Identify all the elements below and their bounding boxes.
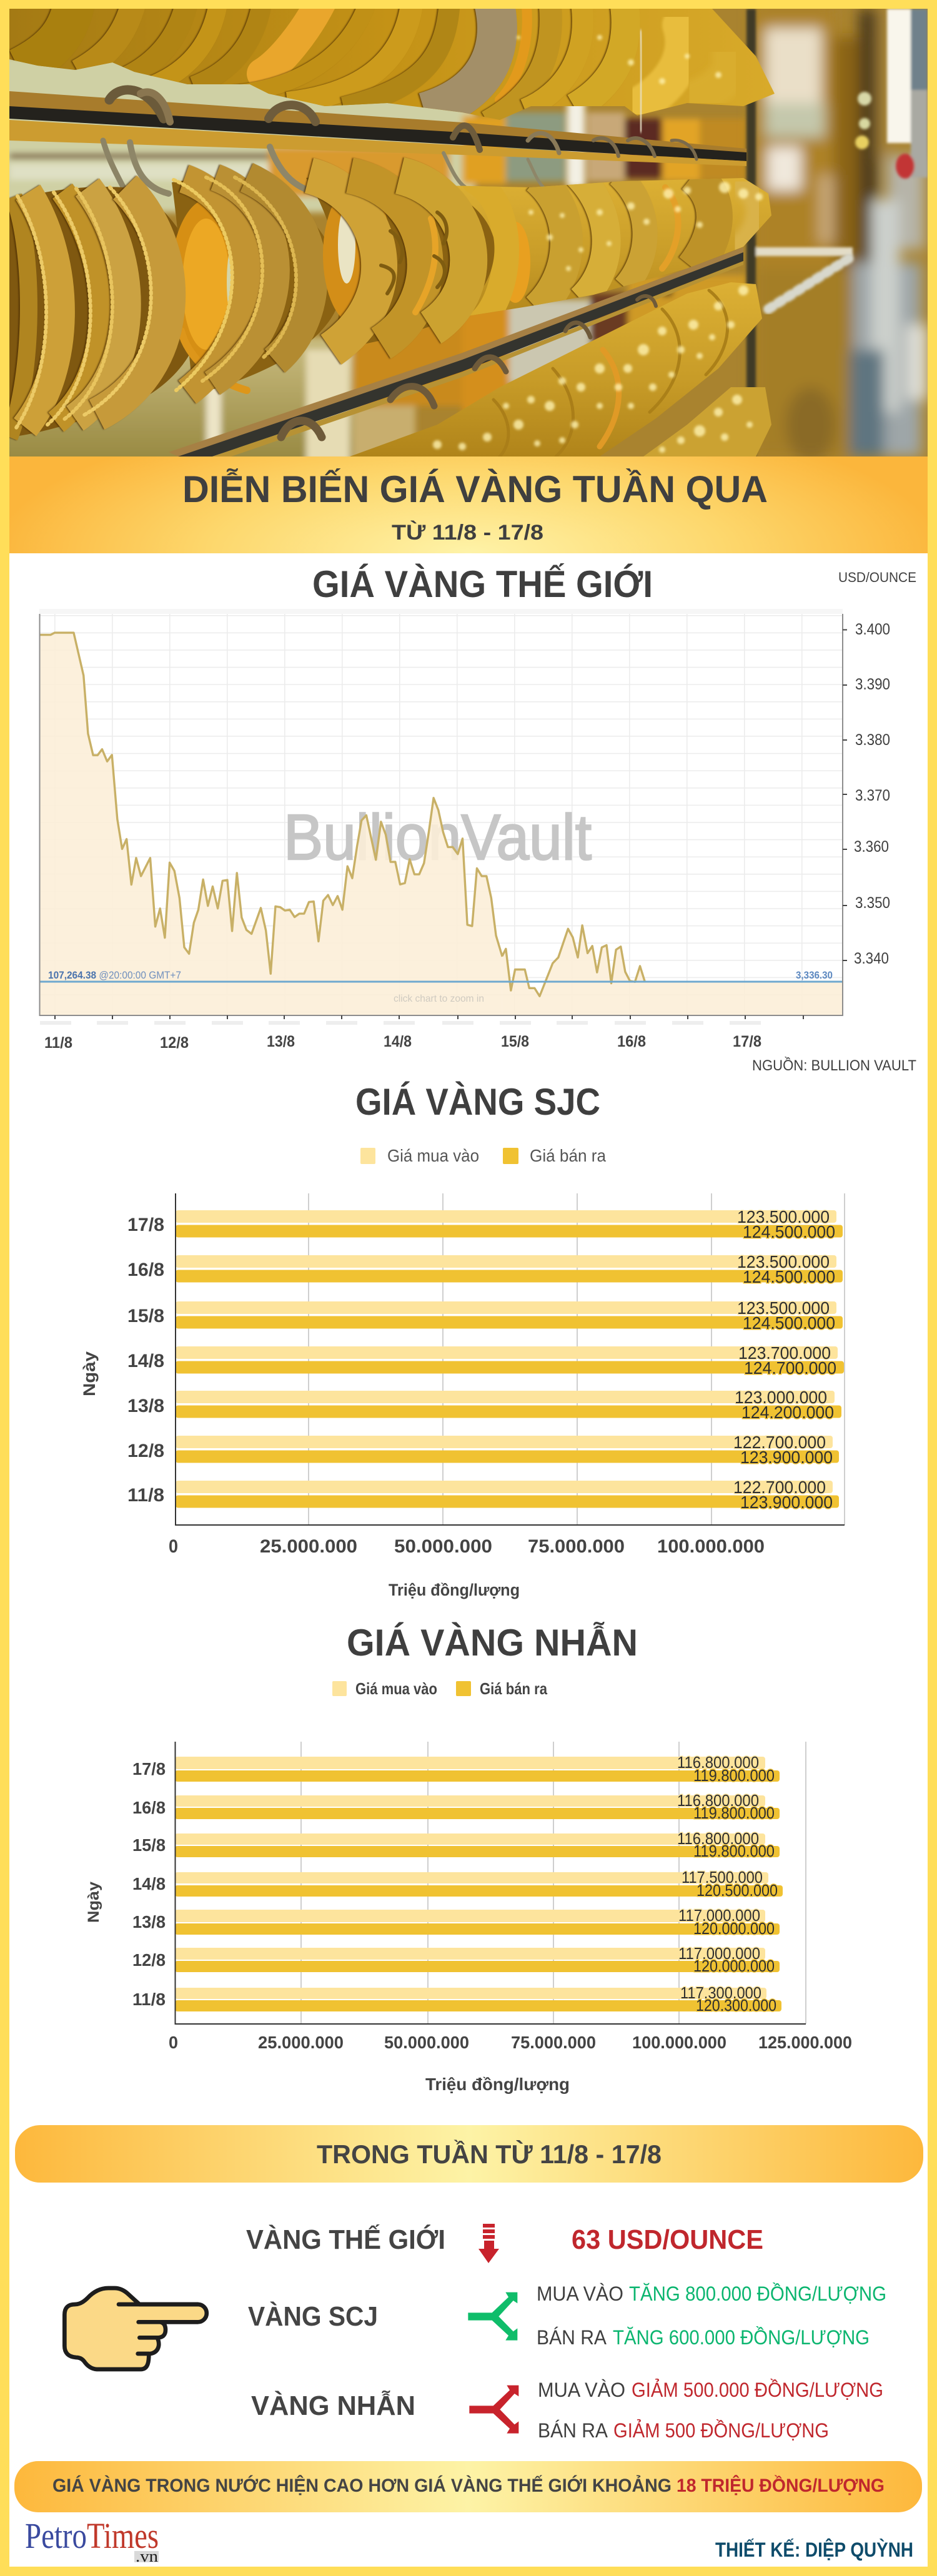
subtitle dates: TỪ 11/8 - 17/8 <box>392 521 543 545</box>
row 13/8: 13/8 <box>127 1396 164 1416</box>
row 11/8: 117.300.000 <box>680 1983 761 2002</box>
row 13/8 <box>132 1906 780 1938</box>
world price change: 63 USD/OUNCE <box>572 2224 763 2255</box>
y axis labels: 3.370 <box>855 787 890 804</box>
x axis date labels: 12/8 <box>160 1034 189 1052</box>
x axis date labels: 11/8 <box>44 1034 72 1052</box>
source note: NGUỒN: BULLION VAULT <box>752 1057 916 1074</box>
legend: ring gold: Giá mua vào <box>355 1679 437 1698</box>
unit label: USD/OUNCE <box>838 570 916 585</box>
row 15/8 <box>127 1298 843 1333</box>
price line <box>39 633 645 996</box>
row 14/8: 14/8 <box>132 1874 166 1893</box>
logo: PetroTimes <box>25 2515 159 2565</box>
row 11/8: 122.700.000 <box>733 1478 826 1497</box>
row 15/8: 15/8 <box>132 1835 166 1855</box>
x axis labels: 0 <box>169 2033 178 2052</box>
row 12/8: 120.000.000 <box>693 1957 775 1975</box>
legend: ring gold <box>332 1679 547 1698</box>
y axis labels: 3.400 <box>855 621 890 638</box>
x axis date labels: 15/8 <box>501 1033 529 1050</box>
x axis date labels: 13/8 <box>267 1033 295 1050</box>
y axis labels <box>854 621 890 967</box>
row 16/8: 16/8 <box>132 1798 166 1817</box>
y axis labels: 3.350 <box>855 894 890 912</box>
row 13/8: 124.200.000 <box>741 1403 834 1422</box>
x axis labels: 50.000.000 <box>394 1536 492 1557</box>
row 16/8 <box>127 1252 843 1286</box>
row 16/8: 119.800.000 <box>693 1804 775 1822</box>
row 13/8: 117.000.000 <box>678 1906 760 1925</box>
row 17/8 <box>132 1753 780 1785</box>
row 11/8: 120.300.000 <box>696 1996 776 2015</box>
large left bangles <box>9 174 495 437</box>
top row of bangles <box>9 0 775 131</box>
lower rows of bangles <box>350 282 771 456</box>
row 15/8: 15/8 <box>127 1306 164 1326</box>
row 14/8 <box>127 1343 844 1378</box>
summary header pill <box>15 2125 923 2183</box>
x axis labels: 75.000.000 <box>528 1536 625 1557</box>
x axis labels: 50.000.000 <box>384 2033 469 2052</box>
icon: red fork arrow <box>469 2386 518 2434</box>
row 12/8 <box>127 1433 839 1467</box>
x axis labels: 125.000.000 <box>758 2033 852 2052</box>
current price line <box>39 980 843 983</box>
row 15/8: 116.800.000 <box>677 1829 759 1848</box>
SJC sell value: TĂNG 600.000 ĐỒNG/LƯỢNG <box>613 2326 870 2349</box>
main title: DIỄN BIẾN GIÁ VÀNG TUẦN QUA <box>182 468 768 510</box>
row: world gold summary <box>246 2224 763 2263</box>
axes <box>40 614 843 1015</box>
legend: SJC <box>360 1146 606 1165</box>
row 14/8 <box>132 1868 783 1900</box>
row 16/8: 116.800.000 <box>677 1791 759 1810</box>
current price label: 3,336.30 <box>796 969 833 981</box>
row 12/8: 12/8 <box>132 1950 166 1970</box>
conclusion pill <box>14 2461 922 2512</box>
ring sell value: GIẢM 500 ĐỒNG/LƯỢNG <box>613 2419 829 2442</box>
heading: world gold price: GIÁ VÀNG THẾ GIỚI <box>312 563 653 605</box>
row 13/8: 120.000.000 <box>693 1919 775 1938</box>
row: SJC gold summary <box>248 2282 886 2349</box>
x axis title: Triệu đồng/lượng <box>425 2075 570 2094</box>
row: SJC gold summary: VÀNG SCJ <box>248 2301 378 2332</box>
row 16/8: 123.500.000 <box>737 1252 830 1271</box>
title band <box>9 456 928 553</box>
right blurred street <box>753 9 928 462</box>
row 15/8: 123.500.000 <box>737 1298 830 1318</box>
area fill <box>39 633 842 1015</box>
row 11/8 <box>127 1478 839 1512</box>
row: world gold summary: VÀNG THẾ GIỚI <box>246 2224 445 2255</box>
row 12/8: 123.900.000 <box>740 1448 833 1467</box>
row 15/8: 119.800.000 <box>693 1842 775 1860</box>
row 12/8: 12/8 <box>127 1441 164 1461</box>
row: ring gold summary <box>251 2379 883 2442</box>
row 15/8 <box>132 1829 780 1860</box>
zoom hint: click chart to zoom in <box>394 994 484 1004</box>
row 12/8 <box>132 1944 780 1975</box>
legend: SJC: Giá bán ra <box>530 1146 606 1165</box>
x axis labels <box>169 2033 852 2052</box>
highlighted gap: 18 TRIỆU ĐỒNG/LƯỢNG <box>677 2475 885 2496</box>
sparkles on gold <box>433 35 763 453</box>
SJC buy change: MUA VÀO <box>537 2282 623 2305</box>
heading: SJC gold: GIÁ VÀNG SJC <box>355 1081 600 1123</box>
ring buy value: GIẢM 500.000 ĐỒNG/LƯỢNG <box>632 2379 883 2401</box>
row 13/8: 13/8 <box>132 1912 166 1932</box>
ring sell change: BÁN RA <box>538 2419 608 2442</box>
x axis labels: 100.000.000 <box>657 1536 765 1557</box>
row 17/8: 123.500.000 <box>737 1207 830 1226</box>
x axis labels: 0 <box>169 1536 178 1557</box>
row 17/8: 116.800.000 <box>677 1753 759 1772</box>
bar chart: ring gold <box>85 1742 852 2094</box>
row 17/8: 124.500.000 <box>743 1222 835 1241</box>
row 16/8: 16/8 <box>127 1260 164 1280</box>
row 14/8: 124.700.000 <box>744 1358 836 1378</box>
row 13/8: 123.000.000 <box>735 1388 827 1407</box>
y axis labels: 3.360 <box>854 838 889 856</box>
row 11/8 <box>132 1983 781 2015</box>
bar chart: SJC <box>80 1193 845 1599</box>
y axis labels: 3.390 <box>855 676 890 693</box>
ring buy change: MUA VÀO <box>538 2379 625 2401</box>
watermark: BullionVault <box>284 801 592 873</box>
row 14/8: 120.500.000 <box>697 1881 778 1900</box>
row 17/8: 17/8 <box>132 1759 166 1779</box>
icon: green fork arrow <box>468 2292 517 2341</box>
row 17/8: 17/8 <box>127 1215 164 1235</box>
x axis labels: 25.000.000 <box>258 2033 344 2052</box>
icon: striped down arrow <box>478 2224 499 2263</box>
legend: ring gold: Giá bán ra <box>480 1679 547 1698</box>
row 14/8: 123.700.000 <box>738 1343 831 1363</box>
heading: ring gold: GIÁ VÀNG NHẪN <box>347 1622 638 1664</box>
row 14/8: 14/8 <box>127 1351 164 1371</box>
designer credit: THIẾT KẾ: DIỆP QUỲNH <box>715 2539 913 2561</box>
row 11/8: 11/8 <box>132 1990 166 2009</box>
y axis labels: 3.380 <box>855 731 890 749</box>
y axis labels: 3.340 <box>854 950 889 967</box>
legend: SJC: Giá mua vào <box>387 1146 479 1165</box>
x axis labels: 100.000.000 <box>632 2033 726 2052</box>
x axis date labels <box>44 1033 761 1052</box>
line chart: world gold price <box>39 609 890 1052</box>
SJC sell change: BÁN RA <box>537 2326 607 2349</box>
crosshair time label: 107,264.38 @20:00:00 GMT+7 <box>48 969 181 981</box>
rail one <box>9 90 746 194</box>
row 11/8: 11/8 <box>127 1485 164 1506</box>
row 14/8: 117.500.000 <box>682 1868 763 1887</box>
y axis title: Ngày <box>85 1882 102 1923</box>
x axis date labels: 14/8 <box>384 1033 412 1050</box>
row 12/8: 122.700.000 <box>733 1433 826 1452</box>
row 12/8: 117.000.000 <box>678 1944 760 1963</box>
logo: PetroTimes: Petro <box>25 2515 87 2556</box>
SJC buy value: TĂNG 800.000 ĐỒNG/LƯỢNG <box>629 2282 886 2305</box>
row 17/8 <box>127 1207 843 1241</box>
hero photo: gold bangles on rails <box>0 0 928 462</box>
x axis date labels: 16/8 <box>617 1033 646 1050</box>
x axis date labels: 17/8 <box>733 1033 761 1050</box>
row two tube of bangles <box>456 178 771 316</box>
icon: pointing hand <box>64 2288 207 2369</box>
x axis labels: 25.000.000 <box>260 1536 357 1557</box>
x axis labels <box>169 1536 765 1557</box>
rail three <box>169 247 853 456</box>
row 13/8 <box>127 1388 841 1422</box>
row 15/8: 124.500.000 <box>743 1313 835 1333</box>
row 16/8: 124.500.000 <box>743 1267 835 1286</box>
white content panel <box>9 553 928 2567</box>
logo: PetroTimes: Times <box>87 2515 159 2556</box>
row 16/8 <box>132 1791 780 1822</box>
row 17/8: 119.800.000 <box>693 1766 775 1785</box>
x axis labels: 75.000.000 <box>511 2033 596 2052</box>
logo: PetroTimes: .vn <box>136 2547 158 2565</box>
conclusion pill: GIÁ VÀNG TRONG NƯỚC HIỆN CAO HƠN GIÁ VÀNG THẾ GIỚI KHOẢNG <box>52 2475 672 2496</box>
x axis title: Triệu đồng/lượng <box>389 1581 520 1599</box>
row 11/8: 123.900.000 <box>740 1493 833 1512</box>
summary header pill: TRONG TUẦN TỪ 11/8 - 17/8 <box>317 2139 662 2169</box>
y axis title: Ngày <box>80 1351 99 1396</box>
row: ring gold summary: VÀNG NHẪN <box>251 2390 415 2421</box>
